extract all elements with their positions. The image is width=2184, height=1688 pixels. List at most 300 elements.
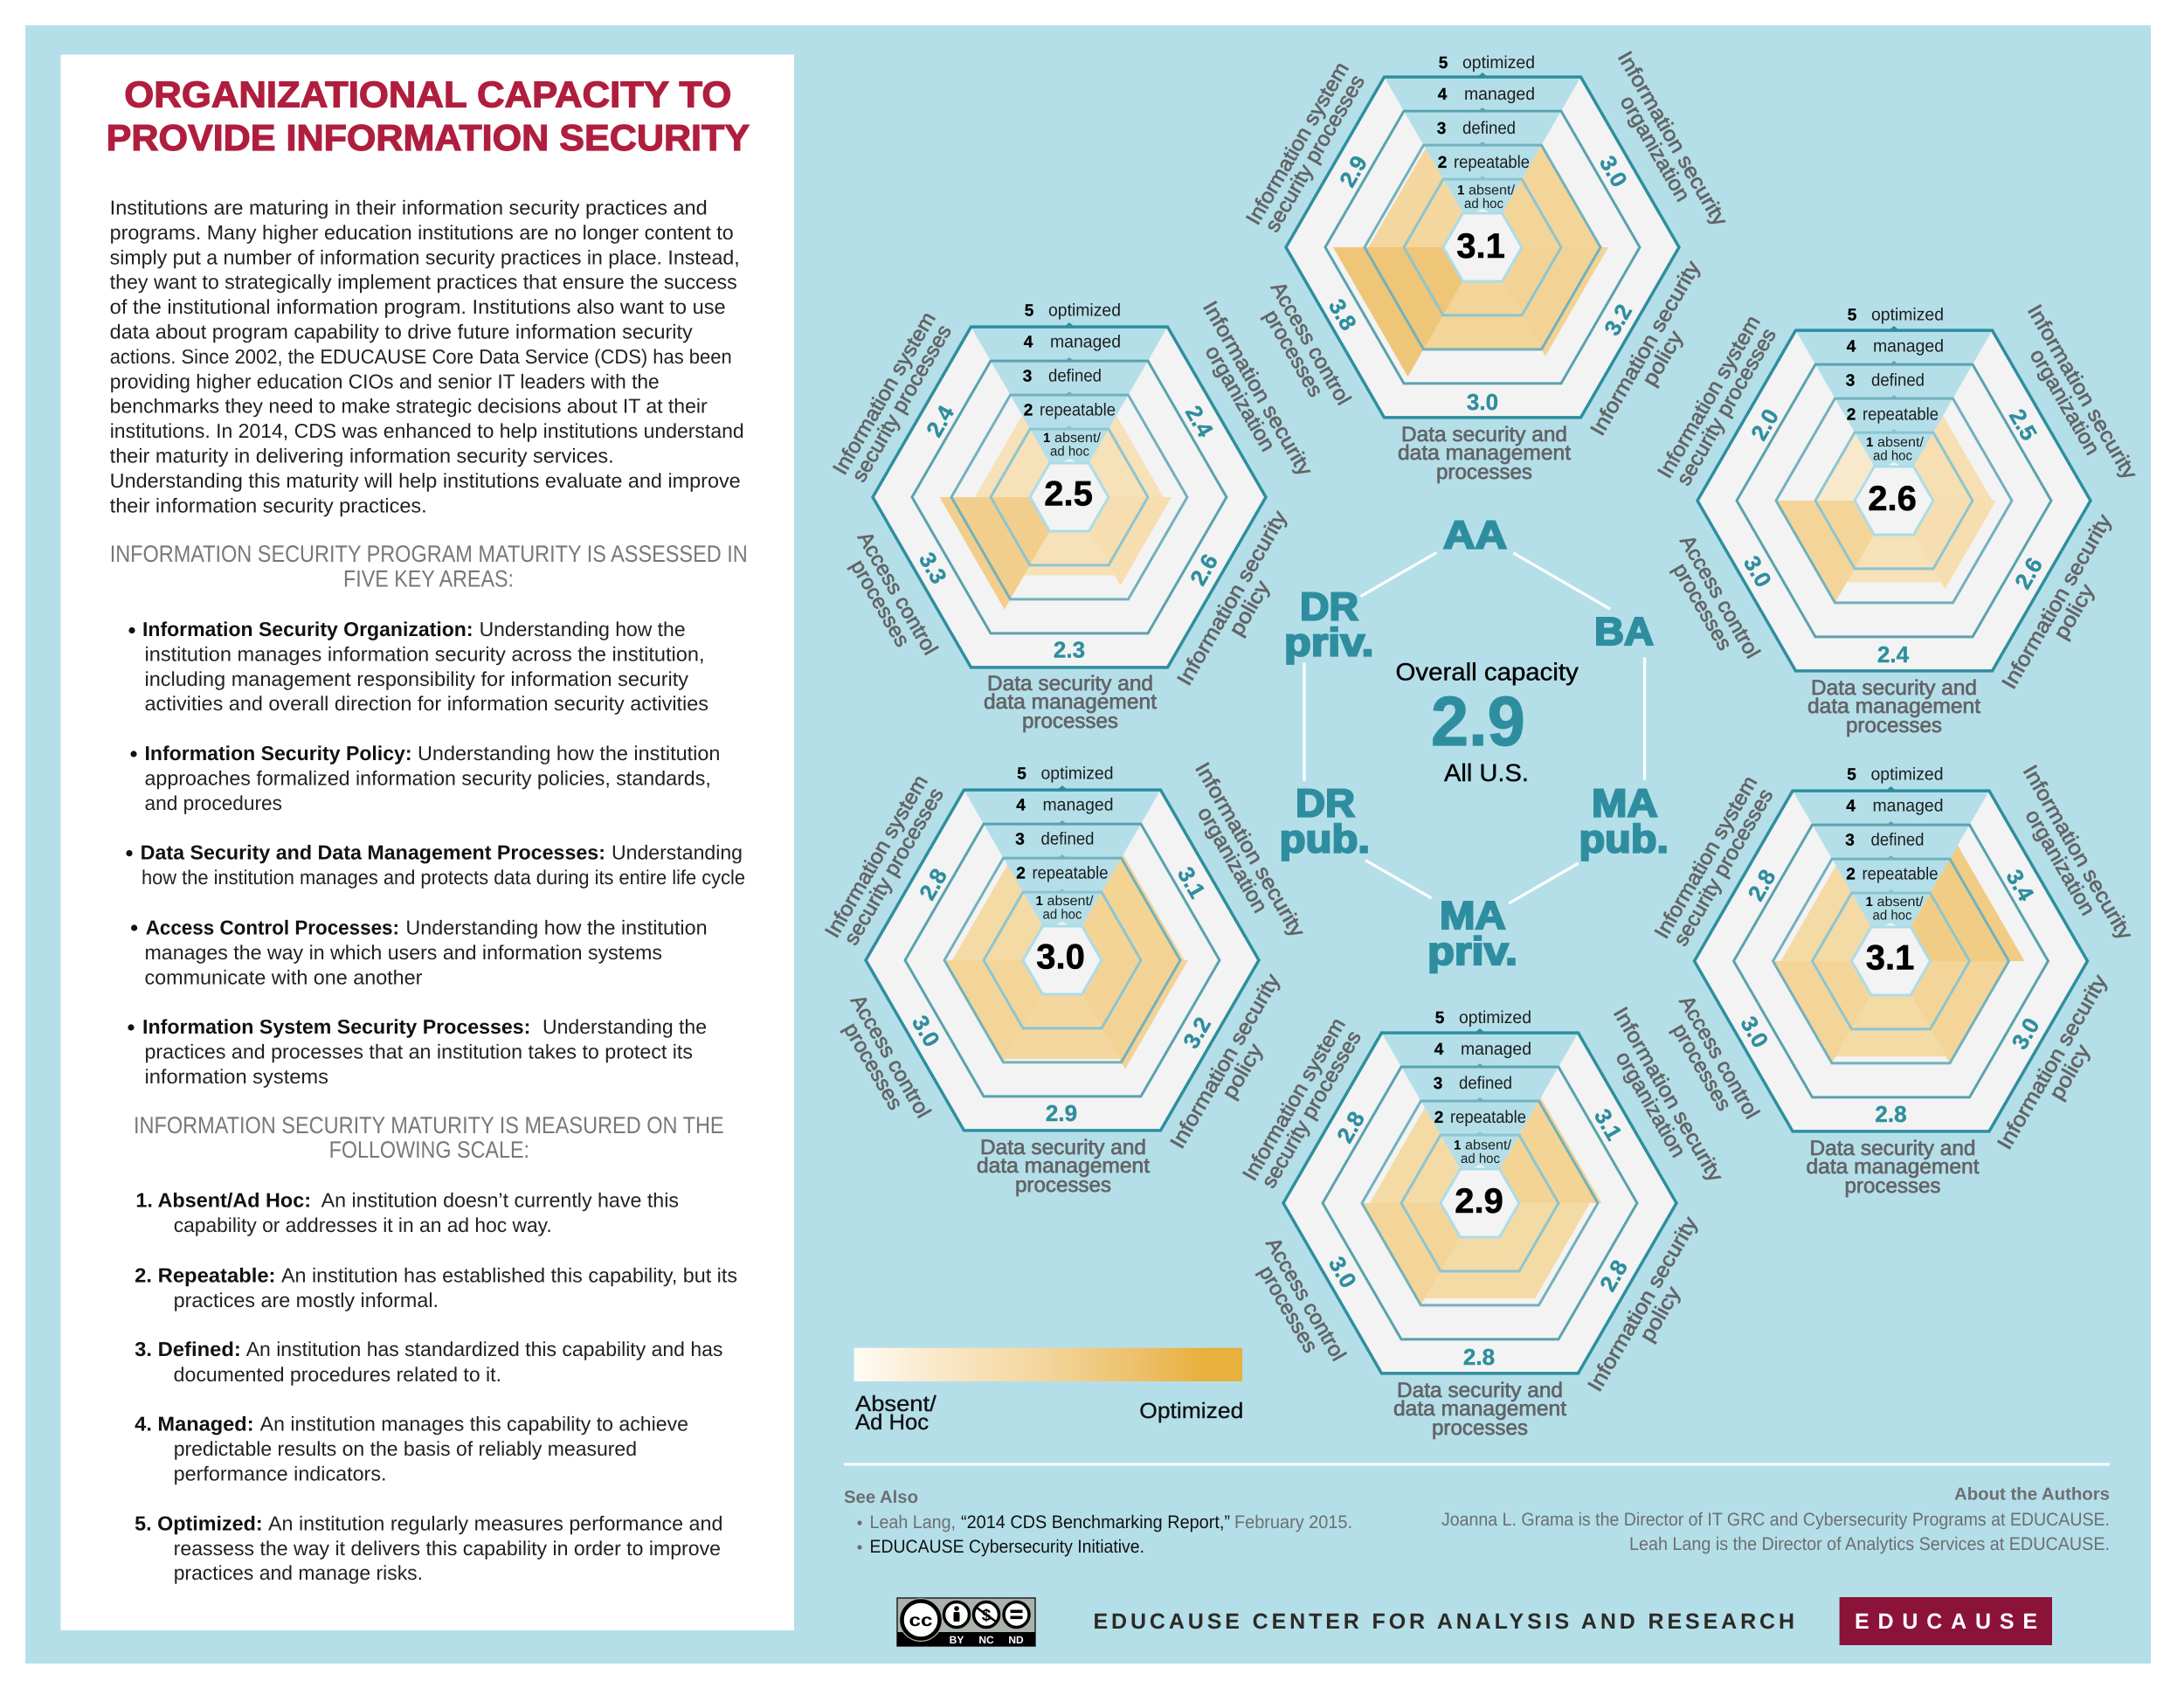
level labels: 2 <box>1846 865 1856 884</box>
bullet: information security organization: activities and overall direction for information security activities <box>145 692 708 715</box>
overall capacity callout: All U.S. <box>1444 759 1529 786</box>
dimension labels: Information security <box>1608 1003 1727 1186</box>
level labels: defined <box>1462 119 1516 138</box>
dimension labels: Information system <box>1650 772 1762 943</box>
dimension labels: policy <box>1635 1283 1685 1346</box>
level labels: optimized <box>1048 301 1121 320</box>
bullet: access control processes: manages the way in which users and information systems <box>145 941 662 964</box>
dimension labels: Information security <box>2022 301 2141 483</box>
dimension labels: security processes <box>1261 71 1370 237</box>
rings <box>1286 73 1679 418</box>
level labels: 1 <box>1043 431 1050 446</box>
level labels: 2 <box>1434 1109 1443 1127</box>
level labels: 1 <box>1457 183 1464 197</box>
dimension values: 3.1 <box>1589 1104 1628 1145</box>
dimension labels <box>1238 1003 1727 1440</box>
legend: maturity gradient <box>854 1348 1243 1435</box>
label: AA: AA <box>1443 512 1507 557</box>
scale item 3: documented procedures related to it. <box>174 1363 501 1386</box>
level labels: optimized <box>1871 306 1944 325</box>
dimension values: 3.4 <box>2001 865 2040 906</box>
dimension values: 2.9 <box>1334 151 1372 191</box>
dimension values <box>1324 151 1637 415</box>
level labels: 3 <box>1437 120 1446 138</box>
scale band <box>1793 791 1989 927</box>
level labels: 3 <box>1015 830 1025 849</box>
level labels: managed <box>1050 332 1121 351</box>
dimension values: 2.0 <box>1745 405 1784 445</box>
dimension labels: Access control <box>1261 1234 1351 1365</box>
dimension labels <box>820 758 1310 1197</box>
radar hexagon: BA <box>1653 301 2141 737</box>
rings <box>1697 326 2091 671</box>
dimension labels: processes <box>839 1019 907 1114</box>
center value: 2.6 <box>1868 480 1917 518</box>
heading: five key areas: FIVE KEY AREAS: <box>343 565 514 591</box>
dimension values: 2.9 <box>1046 1100 1077 1126</box>
dimension labels: processes <box>1846 714 1942 737</box>
level labels: defined <box>1871 830 1924 849</box>
dimension values: 3.0 <box>1324 1252 1362 1292</box>
dimension labels: Data security and <box>1397 1379 1563 1402</box>
dimension labels: processes <box>1668 559 1737 654</box>
dimension labels: Information system <box>1241 59 1354 229</box>
bullet: access control processes: communicate with one another <box>145 965 423 988</box>
overall capacity callout: Overall capacity <box>1396 659 1579 685</box>
level labels <box>1434 1008 1531 1166</box>
level labels: 4 <box>1434 1041 1444 1059</box>
level labels <box>1023 301 1121 460</box>
see also: See Also <box>844 1488 918 1507</box>
level labels: managed <box>1461 1040 1531 1059</box>
overall capacity callout <box>1396 659 1579 786</box>
dimension values: 2.3 <box>1054 636 1085 662</box>
level labels: 1 <box>1454 1138 1461 1153</box>
radar hexagon: MA pub. <box>1650 761 2137 1198</box>
level labels: 3 <box>1845 832 1855 849</box>
dimension values: 3.0 <box>907 1011 945 1051</box>
heading: maturity scale: INFORMATION SECURITY MATURITY IS MEASURED ON THE <box>134 1112 724 1138</box>
bullet: information system security processes: information systems <box>145 1065 328 1088</box>
level labels: optimized <box>1871 765 1943 785</box>
bullet: information security policy: Understanding how the institution <box>418 742 720 764</box>
dimension labels: organization <box>2021 806 2099 919</box>
dimension labels: Information security <box>1613 47 1731 230</box>
dimension values: 3.0 <box>1735 1012 1774 1052</box>
scale item 5: practices and manage risks. <box>174 1561 423 1584</box>
scale item 5: 5. Optimized: <box>135 1512 263 1534</box>
dimension labels: Information security <box>1198 297 1317 480</box>
about the authors: Joanna L. Grama is the Director of IT GRC and Cybersecurity Programs at EDUCAUSE. <box>1441 1510 2110 1530</box>
radar hexagon: DR pub. <box>820 758 1310 1197</box>
dimension values: 2.8 <box>1594 1256 1633 1296</box>
dimension labels: organization <box>1615 92 1695 205</box>
scale item 3 <box>135 1338 722 1386</box>
dimension labels: processes <box>1015 1173 1111 1197</box>
level labels: managed <box>1873 337 1944 356</box>
bullet: information security organization: Information Security Organization: <box>142 618 473 640</box>
bullet: data security and data management processes <box>126 841 745 889</box>
data sectors <box>1333 145 1608 377</box>
intro paragraph: providing higher education CIOs and senior IT leaders with the <box>110 370 660 392</box>
label: DR priv. <box>1284 585 1373 665</box>
level labels: 2 <box>1847 405 1856 425</box>
bullet: data security and data management processes: how the institution manages and protects data during its entire life cycle <box>142 866 745 889</box>
data sectors <box>1773 846 2025 1063</box>
dimension labels <box>1653 301 2141 737</box>
intro paragraph: their maturity in delivering information security services. <box>110 444 614 467</box>
dimension values: 2.8 <box>1742 865 1781 905</box>
label: MA priv.: MA <box>1440 893 1506 937</box>
dimension labels: security processes <box>1257 1027 1366 1193</box>
level labels: 5 <box>1025 302 1034 320</box>
bullet: information security policy: and procedures <box>145 792 282 814</box>
bullet: information system security processes: practices and processes that an institution takes to protect its <box>145 1040 693 1062</box>
label: DR priv.: DR <box>1300 585 1358 629</box>
see also: Leah Lang, <box>870 1512 956 1532</box>
dimension labels: organization <box>1611 1048 1690 1161</box>
label: MA pub.: pub. <box>1579 817 1669 861</box>
panel: text column <box>61 54 794 1630</box>
level labels: ad hoc <box>1873 909 1912 923</box>
dimension labels: policy <box>1218 1040 1268 1103</box>
dimension labels: data management <box>1393 1397 1566 1421</box>
dimension labels: data management <box>977 1154 1150 1178</box>
heading: maturity scale <box>134 1112 724 1163</box>
bullet: data security and data management processes: Data Security and Data Management Processes: <box>141 841 605 864</box>
data sectors <box>940 416 1171 610</box>
dimension labels: Information security <box>1172 507 1292 689</box>
level labels <box>1015 764 1113 923</box>
scale item 4: An institution manages this capability to achieve <box>260 1413 688 1435</box>
dimension labels: data management <box>1807 1155 1980 1179</box>
level labels: 1 <box>1866 435 1873 450</box>
dimension values <box>914 400 1223 662</box>
rings <box>866 785 1259 1131</box>
level labels: repeatable <box>1454 153 1530 172</box>
level labels: absent/ <box>1877 435 1925 450</box>
about the authors: Leah Lang is the Director of Analytics Services at EDUCAUSE. <box>1629 1534 2110 1554</box>
dimension values <box>1324 1104 1633 1370</box>
level labels <box>1845 765 1943 923</box>
scale item 2: An institution has established this capability, but its <box>281 1263 737 1286</box>
level labels <box>1846 306 1944 463</box>
level labels: managed <box>1464 85 1535 104</box>
dimension values: 3.3 <box>914 548 952 588</box>
level labels: repeatable <box>1033 863 1108 882</box>
center value: 2.9 <box>1455 1182 1503 1221</box>
bullet: information system security processes <box>128 1015 707 1088</box>
scale item 1: 1. Absent/Ad Hoc: <box>135 1189 311 1212</box>
heading: maturity scale: FOLLOWING SCALE: <box>329 1137 529 1163</box>
rings <box>873 322 1266 668</box>
scale item 1 <box>135 1189 679 1236</box>
level labels: managed <box>1873 797 1943 816</box>
dimension values: 2.4 <box>1877 641 1910 668</box>
title: PROVIDE INFORMATION SECURITY <box>107 117 750 158</box>
intro paragraph: Understanding this maturity will help institutions evaluate and improve <box>110 469 741 492</box>
heading: five key areas <box>110 541 748 591</box>
dimension labels: Access control <box>1675 531 1765 662</box>
dimension labels: Information security <box>1586 257 1705 439</box>
dimension labels: Information security <box>1190 758 1310 941</box>
bullet: information security organization: Understanding how the <box>480 618 686 640</box>
overall capacity callout: 2.9 <box>1431 682 1525 760</box>
data sectors <box>944 854 1188 1069</box>
center value: 3.1 <box>1456 227 1505 266</box>
dimension values: 2.5 <box>2004 405 2042 445</box>
level labels: 4 <box>1016 797 1026 814</box>
level labels: 2 <box>1438 154 1447 172</box>
dimension labels: data management <box>1807 695 1980 718</box>
level labels: defined <box>1459 1074 1512 1093</box>
label: DR priv.: priv. <box>1284 620 1373 665</box>
level labels: 3 <box>1434 1075 1442 1093</box>
bullet: access control processes <box>131 916 708 988</box>
intro paragraph: programs. Many higher education institutions are no longer content to <box>110 221 734 244</box>
dimension labels: organization <box>1192 803 1272 917</box>
intro paragraph: benchmarks they need to make strategic decisions about IT at their <box>110 395 708 418</box>
dimension values: 3.8 <box>1324 294 1362 335</box>
level labels: 5 <box>1847 765 1856 785</box>
scale band <box>1796 330 1992 467</box>
scale item 5: reassess the way it delivers this capability in order to improve <box>174 1537 721 1560</box>
level labels: 4 <box>1847 337 1856 356</box>
dimension values: 2.6 <box>1185 550 1223 590</box>
dimension labels: Information security <box>1993 971 2112 1153</box>
bullet: information security policy: approaches formalized information security policies, standards, <box>145 767 711 790</box>
dimension labels: Information system <box>828 308 941 479</box>
bullet: information system security processes: Understanding the <box>543 1015 707 1038</box>
about the authors: About the Authors <box>1954 1485 2110 1505</box>
scale item 3: An institution has standardized this capability and has <box>246 1338 722 1360</box>
level labels: 1 <box>1036 894 1043 909</box>
scale item 2: practices are mostly informal. <box>174 1289 439 1311</box>
center value: 2.5 <box>1044 475 1093 514</box>
scale item 4: predictable results on the basis of reliably measured <box>174 1437 637 1460</box>
level labels: absent/ <box>1047 894 1094 909</box>
dimension labels: security processes <box>847 321 957 487</box>
dimension labels: Access control <box>1675 992 1764 1123</box>
bullet: access control processes: Access Control Processes: <box>146 916 399 938</box>
dimension values: 3.2 <box>1599 300 1637 340</box>
dimension values: 3.0 <box>1467 389 1498 415</box>
bullet: access control processes: Understanding how the institution <box>405 916 708 938</box>
dimension labels: processes <box>1254 1262 1323 1357</box>
level labels: managed <box>1043 795 1113 814</box>
dimension values: 3.1 <box>1172 862 1211 903</box>
dimension values <box>1735 865 2045 1127</box>
data sectors <box>1362 1097 1602 1305</box>
heading: five key areas: INFORMATION SECURITY PROGRAM MATURITY IS ASSESSED IN <box>110 541 748 567</box>
bullet: information security policy: Information Security Policy: <box>145 742 412 764</box>
scale item 1: capability or addresses it in an ad hoc way. <box>174 1214 552 1236</box>
icon: creative commons badge: BY <box>950 1634 964 1646</box>
bullet: information security policy <box>130 742 720 814</box>
icon: creative commons badge: $ <box>982 1607 992 1625</box>
radar hexagon: AA <box>1241 47 1731 484</box>
dimension labels: data management <box>984 690 1157 714</box>
dimension labels: Access control <box>846 991 935 1122</box>
dimension labels: Information system <box>1653 312 1766 482</box>
center for analysis and research wordmark: EDUCAUSE CENTER FOR ANALYSIS AND RESEARCH <box>1094 1609 1794 1634</box>
radar hexagon: MA priv. <box>1238 1003 1727 1440</box>
intro paragraph: data about program capability to drive future information security <box>110 320 693 342</box>
scale item 2 <box>135 1263 737 1311</box>
scale item 5 <box>135 1512 722 1584</box>
dimension labels: processes <box>1845 1174 1941 1198</box>
dimension labels: Information security <box>1165 970 1285 1152</box>
dimension values: 3.0 <box>2006 1013 2045 1054</box>
intro paragraph: actions. Since 2002, the EDUCAUSE Core Data Service (CDS) has been <box>110 345 732 368</box>
dimension labels: organization <box>2025 345 2105 459</box>
scale band <box>1384 77 1581 213</box>
level labels: 5 <box>1017 765 1026 783</box>
intro paragraph: they want to strategically implement practices that ensure the success <box>110 271 737 294</box>
connector lines <box>1304 552 1644 903</box>
level labels: repeatable <box>1040 400 1116 419</box>
label: BA: BA <box>1594 609 1654 654</box>
intro paragraph: simply put a number of information security practices in place. Instead, <box>110 246 740 268</box>
level labels: 5 <box>1435 1009 1445 1027</box>
scale item 3: 3. Defined: <box>135 1338 241 1360</box>
legend: maturity gradient: Optimized <box>1139 1399 1243 1423</box>
dimension values: 2.6 <box>2009 553 2048 593</box>
see also: EDUCAUSE Cybersecurity Initiative. <box>870 1537 1144 1557</box>
level labels: 4 <box>1846 797 1856 816</box>
icon: creative commons badge: cc <box>909 1611 933 1630</box>
label: DR pub.: pub. <box>1280 817 1370 861</box>
title: ORGANIZATIONAL CAPACITY TO <box>124 73 731 114</box>
dimension labels: Information security <box>1997 510 2117 693</box>
dimension labels: policy <box>2049 580 2099 643</box>
level labels: 5 <box>1439 54 1448 73</box>
rings <box>1695 786 2088 1131</box>
scale item 1: An institution doesn’t currently have this <box>321 1189 679 1212</box>
bullet: information system security processes: Information System Security Processes: <box>142 1015 530 1038</box>
center value: 3.1 <box>1866 938 1914 977</box>
dimension values: 2.4 <box>1180 401 1219 442</box>
dimension labels: data management <box>1398 441 1571 465</box>
intro paragraph <box>110 196 744 516</box>
rings <box>1283 1028 1676 1373</box>
dimension labels: processes <box>1259 306 1327 401</box>
level labels: defined <box>1048 367 1102 386</box>
see also: “2014 CDS Benchmarking Report,” <box>961 1512 1230 1532</box>
level labels: ad hoc <box>1464 197 1503 211</box>
icon: creative commons badge: NC <box>978 1634 994 1646</box>
level labels: absent/ <box>1054 431 1102 446</box>
dimension values: 2.8 <box>1331 1107 1370 1147</box>
dimension labels: security processes <box>1672 324 1781 490</box>
label: MA pub. <box>1579 781 1669 861</box>
dimension labels: Data security and <box>1401 423 1567 446</box>
label: DR pub.: DR <box>1296 781 1355 826</box>
bullet: information security organization: including management responsibility for information security <box>145 668 689 690</box>
dimension labels: policy <box>1225 577 1275 640</box>
bullet: information security organization: institution manages information security across the institution, <box>145 642 704 665</box>
icon: creative commons badge <box>897 1598 1035 1646</box>
bullet: information security organization <box>128 618 708 715</box>
level labels: absent/ <box>1465 1138 1512 1153</box>
dimension values: 3.0 <box>1594 151 1633 191</box>
dimension labels: organization <box>1200 342 1280 455</box>
logo: EDUCAUSE <box>1840 1597 2052 1645</box>
dimension labels: processes <box>846 556 914 651</box>
dimension labels: processes <box>1668 1020 1736 1115</box>
level labels <box>1437 53 1535 211</box>
dimension values: 3.0 <box>1738 551 1777 591</box>
dimension labels <box>1650 761 2137 1198</box>
dimension labels: policy <box>2045 1041 2095 1103</box>
level labels: 1 <box>1866 895 1873 910</box>
center hexagon: institution type navigator <box>1280 512 1669 973</box>
level labels: defined <box>1871 370 1925 390</box>
scale item 2: 2. Repeatable: <box>135 1263 276 1286</box>
scale band <box>964 790 1160 926</box>
legend: maturity gradient: Ad Hoc <box>855 1410 929 1435</box>
scale item 5: An institution regularly measures performance and <box>268 1512 722 1534</box>
level labels: 2 <box>1016 865 1026 882</box>
scale band <box>971 327 1167 463</box>
scale item 4: 4. Managed: <box>135 1413 254 1435</box>
label: MA priv.: priv. <box>1427 929 1517 973</box>
intro paragraph: their information security practices. <box>110 494 427 516</box>
about the authors <box>1441 1485 2110 1554</box>
dimension labels: Information security <box>1583 1213 1703 1395</box>
dimension values: 3.2 <box>1178 1013 1216 1053</box>
dimension labels: security processes <box>1669 785 1778 951</box>
level labels: optimized <box>1041 764 1113 783</box>
level labels: 3 <box>1023 367 1032 386</box>
scale item 4: performance indicators. <box>174 1463 386 1485</box>
data sectors <box>1776 416 1996 603</box>
level labels: defined <box>1041 830 1094 849</box>
level labels: 3 <box>1846 372 1855 390</box>
intro paragraph: institutions. In 2014, CDS was enhanced to help institutions understand <box>110 419 744 442</box>
dimension labels: Access control <box>853 528 942 659</box>
dimension labels: Data security and <box>980 1136 1146 1159</box>
label: MA pub.: MA <box>1592 781 1658 826</box>
level labels: repeatable <box>1863 405 1939 425</box>
see also: February 2015. <box>1234 1512 1352 1532</box>
see also <box>844 1488 1352 1557</box>
level labels: ad hoc <box>1461 1152 1500 1166</box>
dimension labels <box>1241 47 1731 484</box>
dimension labels: processes <box>1432 1416 1528 1440</box>
dimension values: 2.8 <box>914 864 952 904</box>
title <box>107 73 750 158</box>
intro paragraph: Institutions are maturing in their information security practices and <box>110 196 708 218</box>
logo: EDUCAUSE: EDUCAUSE <box>1855 1609 2037 1634</box>
level labels: repeatable <box>1450 1108 1526 1127</box>
legend: maturity gradient: Absent/ <box>855 1392 936 1416</box>
level labels: ad hoc <box>1043 907 1082 923</box>
intro paragraph: of the institutional information program. Institutions also want to use <box>110 295 726 318</box>
dimension labels: Information security <box>2018 761 2137 944</box>
center value: 3.0 <box>1036 938 1085 977</box>
dimension labels: Information system <box>1238 1014 1351 1185</box>
dimension labels: Data security and <box>987 672 1153 695</box>
level labels: optimized <box>1462 53 1535 73</box>
scale band <box>1382 1033 1578 1169</box>
dimension values: 2.8 <box>1463 1344 1495 1370</box>
scale item 4 <box>135 1413 688 1485</box>
radar hexagon: DR priv. <box>828 297 1317 733</box>
dimension labels: Data security and <box>1810 1137 1975 1160</box>
label: MA priv. <box>1427 893 1517 973</box>
dimension values <box>907 862 1216 1126</box>
